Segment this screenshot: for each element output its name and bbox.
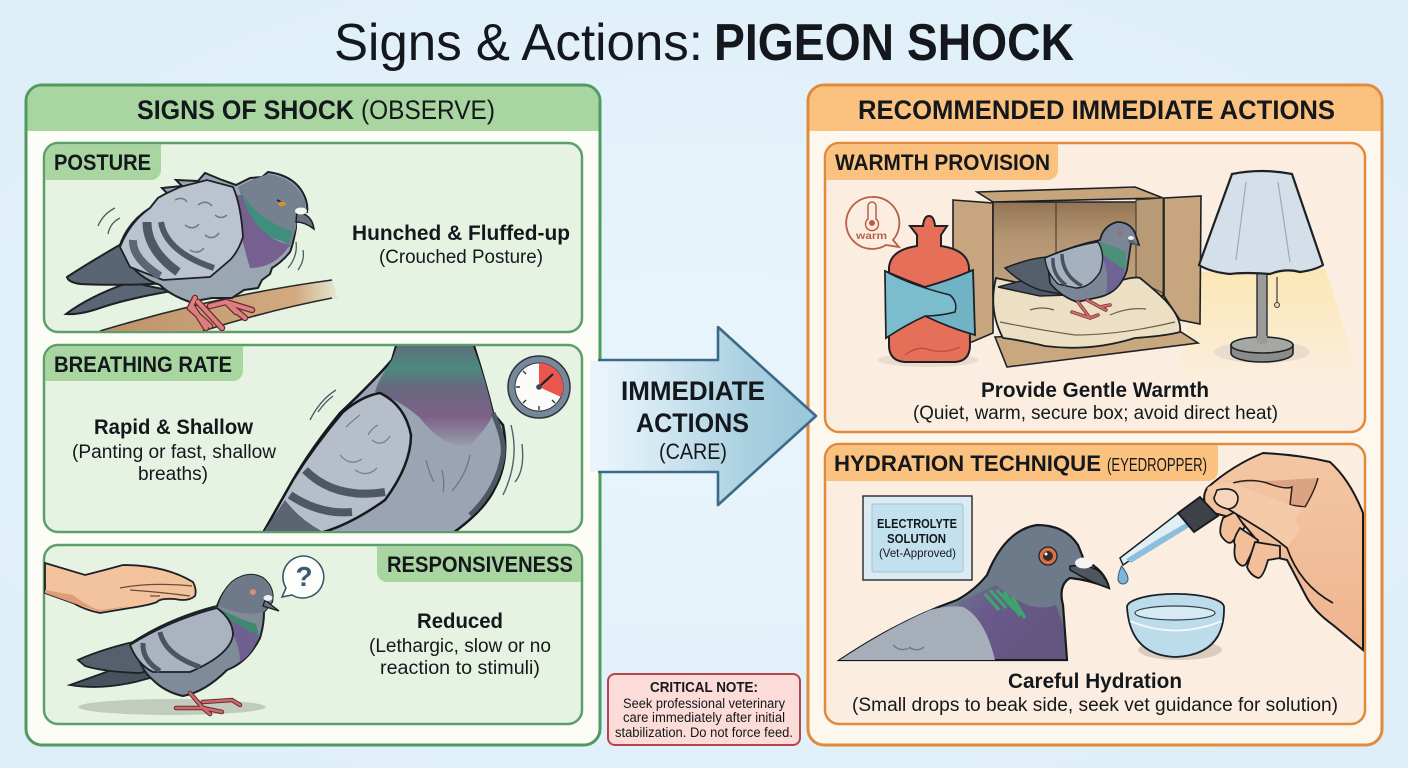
panel: recommended immediate actions [808,85,1382,745]
illustration: electrolyte solution packet: (Vet-Approved) [879,546,956,560]
callout: critical note: Seek professional veterinary [623,696,785,711]
text: hunched and fluffed-up [352,222,570,268]
text: rapid and shallow: (Panting or fast, shallow [72,442,276,463]
sub-panel: breathing rate [44,343,582,533]
arrow: immediate actions: IMMEDIATE [621,376,765,406]
illustration: pigeon head and neck [840,525,1109,660]
sub-panel: hydration technique [825,444,1365,724]
tab: responsiveness: RESPONSIVENESS [387,552,573,577]
tab: breathing rate: BREATHING RATE [54,352,232,377]
text: reduced: Reduced [417,610,503,633]
title [334,14,1074,72]
title: PIGEON SHOCK [714,14,1074,72]
panel header: signs of shock: SIGNS OF SHOCK [137,95,354,125]
text: careful hydration [852,670,1338,716]
tab: responsiveness [377,546,580,582]
icon: stopwatch [508,356,570,418]
illustration: table lamp [1199,171,1323,363]
sub-panel: responsiveness [44,545,582,724]
arrow: immediate actions: (CARE) [659,439,727,464]
title: Signs & Actions: [334,14,703,72]
text: provide gentle warmth [913,379,1278,424]
text: careful hydration: Careful Hydration [1008,670,1182,693]
icon: question bubble [282,556,324,598]
tab: breathing rate [46,346,243,381]
illustration: hunched pigeon on perch [66,172,338,331]
callout: critical note [608,674,800,745]
icon: question bubble: ? [295,561,313,592]
tab: hydration technique: (EYEDROPPER) [1107,455,1207,475]
text: provide gentle warmth: Provide Gentle Warmth [981,379,1209,402]
tab: warmth provision [826,144,1058,180]
text: rapid and shallow: breaths) [138,464,208,485]
callout: critical note: CRITICAL NOTE: [650,680,758,696]
sub-panel: warmth provision [825,143,1365,432]
tab: posture: POSTURE [54,150,151,175]
illustration: lamp light glow [1175,268,1362,385]
illustration: pigeon chest breathing [263,343,523,533]
panel header: signs of shock [28,86,598,131]
icon: warm thermometer bubble [846,197,899,249]
illustration: electrolyte solution packet: SOLUTION [887,532,946,546]
text: hunched and fluffed-up: Hunched & Fluffed-up [352,222,570,245]
arrow: immediate actions [590,327,816,505]
illustration: electrolyte solution packet: ELECTROLYTE [877,517,957,531]
text: reduced [369,610,551,679]
text: rapid and shallow [72,416,276,485]
tab: posture [46,144,161,180]
panel header: recommended immediate actions: RECOMMENDED IMMEDIATE ACTIONS [858,95,1335,125]
sub-panel: posture [44,143,582,332]
illustration: hand holding eyedropper [1120,453,1363,650]
text: careful hydration: (Small drops to beak side, seek vet guidance for solution) [852,695,1338,716]
icon: warm thermometer bubble: warm [855,231,887,242]
illustration: wrapped hot water bottle [878,216,978,367]
tab: hydration technique [826,446,1218,481]
text: hunched and fluffed-up: (Crouched Posture) [379,247,543,268]
panel: signs of shock [26,85,600,745]
illustration: hand above unresponsive pigeon [45,563,279,715]
illustration: electrolyte solution packet [863,496,972,580]
arrow: immediate actions: ACTIONS [636,408,749,438]
panel header: recommended immediate actions [810,86,1380,131]
panel header: signs of shock: (OBSERVE) [361,95,495,125]
tab: hydration technique: HYDRATION TECHNIQUE [834,451,1101,476]
callout: critical note: care immediately after initial [623,710,785,725]
text: provide gentle warmth: (Quiet, warm, secure box; avoid direct heat) [913,403,1278,424]
illustration: water droplet [1118,566,1128,584]
text: reduced: reaction to stimuli) [380,658,540,679]
illustration: cardboard box with pigeon [953,187,1201,367]
illustration: water bowl [1127,594,1224,660]
tab: warmth provision: WARMTH PROVISION [835,150,1050,175]
callout: critical note: stabilization. Do not force feed. [615,725,793,740]
text: reduced: (Lethargic, slow or no [369,636,551,657]
text: rapid and shallow: Rapid & Shallow [94,416,254,439]
